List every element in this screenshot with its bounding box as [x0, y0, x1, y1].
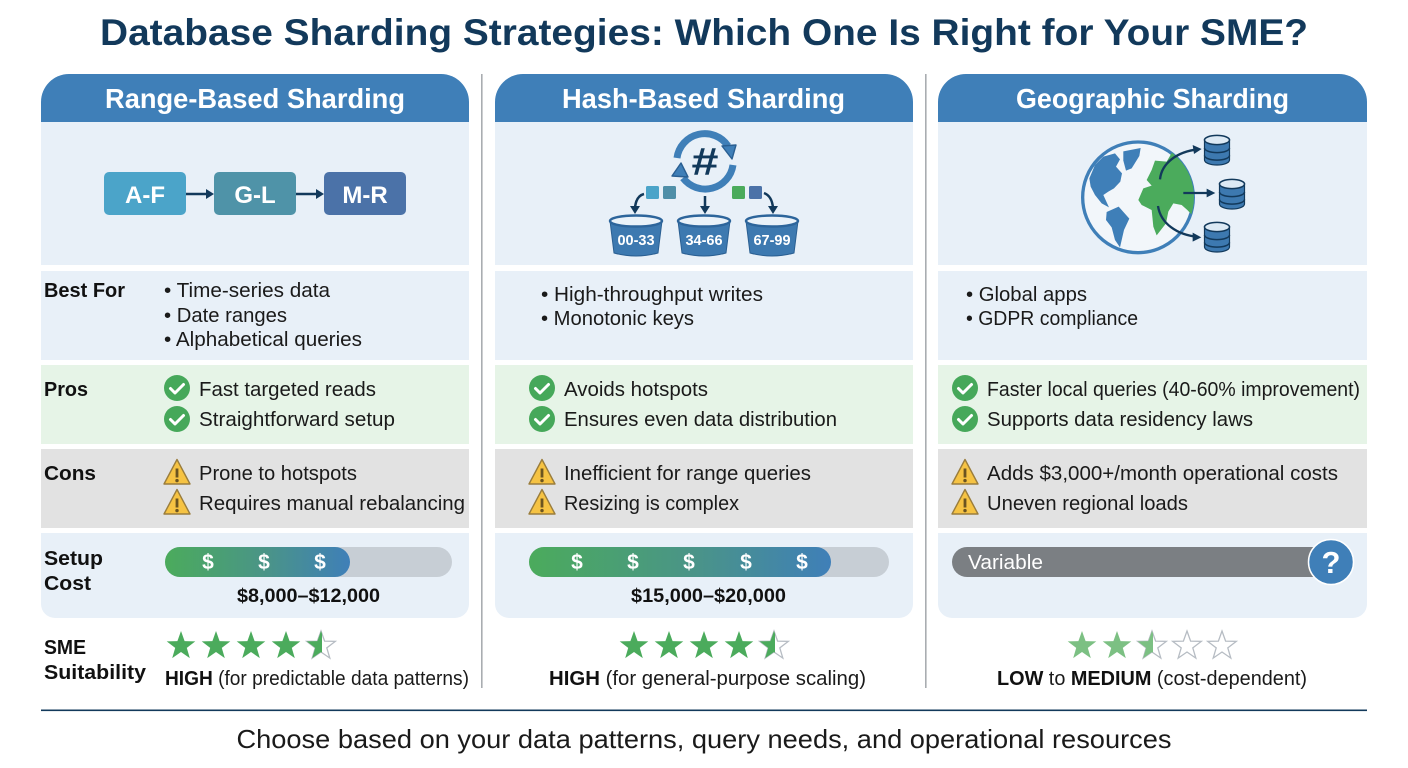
panel: geographic sharding [938, 74, 1367, 690]
row: setup cost: $ [740, 551, 752, 574]
panel: range-based sharding [41, 74, 469, 690]
row: setup cost: Variable [968, 552, 1043, 574]
row: setup cost: $8,000–$12,000 [237, 586, 380, 607]
row: cons: Prone to hotspots [199, 463, 357, 485]
row: setup cost: $ [796, 551, 808, 574]
row: SME suitability: HIGH (for general-purpose scaling) [549, 668, 866, 690]
row: setup cost [495, 533, 913, 618]
row: SME suitability: Suitability [44, 662, 147, 684]
hash diagram: # [692, 141, 719, 184]
hash diagram: 00-33 [617, 233, 655, 249]
row: setup cost: $ [683, 551, 695, 574]
row: best for: • Monotonic keys [541, 308, 694, 330]
row: pros: Ensures even data distribution [564, 409, 837, 431]
range diagram: A-F [125, 182, 165, 209]
row: best for: • Alphabetical queries [164, 329, 362, 351]
row: setup cost: Cost [44, 573, 91, 595]
column header [938, 74, 1367, 122]
title: Database Sharding Strategies: Which One Is Right for Your SME? [100, 12, 1308, 53]
row: setup cost: $ [571, 551, 583, 574]
row: setup cost: $15,000–$20,000 [631, 586, 786, 607]
row: cons: Adds $3,000+/month operational costs [987, 463, 1338, 485]
row: SME suitability [549, 631, 866, 690]
range diagram: M-R [342, 182, 388, 209]
row: cons [41, 449, 469, 528]
row: pros [938, 365, 1367, 444]
row: SME suitability: LOW to MEDIUM (cost-dependent) [997, 668, 1307, 690]
row: setup cost: ? [1322, 545, 1340, 580]
row: setup cost: $ [627, 551, 639, 574]
row: best for: • Date ranges [164, 305, 287, 327]
row: best for [495, 271, 913, 360]
row: SME suitability: SME [44, 637, 86, 659]
row: best for: • GDPR compliance [966, 308, 1138, 330]
column header [41, 74, 469, 122]
row: pros: Supports data residency laws [987, 409, 1253, 431]
row: best for [938, 271, 1367, 360]
range diagram: G-L [234, 182, 276, 209]
row: cons: Resizing is complex [564, 493, 739, 515]
row: cons: Uneven regional loads [987, 493, 1188, 515]
row: best for: • Time-series data [164, 280, 331, 302]
row: SME suitability [997, 631, 1307, 690]
panel: hash-based sharding [495, 74, 913, 690]
hash diagram: 34-66 [685, 233, 723, 249]
row: best for [41, 271, 469, 360]
row: cons [938, 449, 1367, 528]
hash diagram: 67-99 [753, 233, 791, 249]
hash diagram [495, 122, 913, 265]
row: setup cost: $ [314, 551, 326, 574]
column header: Geographic Sharding [1016, 83, 1289, 114]
row: setup cost: Setup [44, 548, 103, 570]
column header: Range-Based Sharding [105, 83, 405, 114]
row: pros [41, 365, 469, 444]
row: SME suitability: HIGH (for predictable data patterns) [165, 668, 469, 690]
row: pros: Straightforward setup [199, 409, 395, 431]
column header: Hash-Based Sharding [562, 83, 845, 114]
row: cons: Cons [44, 463, 96, 485]
row: cons: Requires manual rebalancing [199, 493, 465, 515]
column header [495, 74, 913, 122]
row: pros: Faster local queries (40-60% improvement) [987, 379, 1360, 401]
footer takeaway: Choose based on your data patterns, query needs, and operational resources [236, 724, 1172, 754]
row: setup cost [41, 533, 469, 618]
row: pros: Fast targeted reads [199, 379, 376, 401]
row: SME suitability [44, 631, 469, 690]
row: pros [495, 365, 913, 444]
row: best for: Best For [44, 280, 125, 302]
range diagram [41, 122, 469, 265]
row: pros: Avoids hotspots [564, 379, 708, 401]
row: best for: • High-throughput writes [541, 284, 763, 306]
row: pros: Pros [44, 379, 88, 401]
globe diagram [938, 122, 1367, 265]
row: cons [495, 449, 913, 528]
row: cons: Inefficient for range queries [564, 463, 811, 485]
row: setup cost: $ [258, 551, 270, 574]
row: setup cost: $ [202, 551, 214, 574]
row: best for: • Global apps [966, 284, 1087, 306]
row: setup cost [938, 533, 1367, 618]
